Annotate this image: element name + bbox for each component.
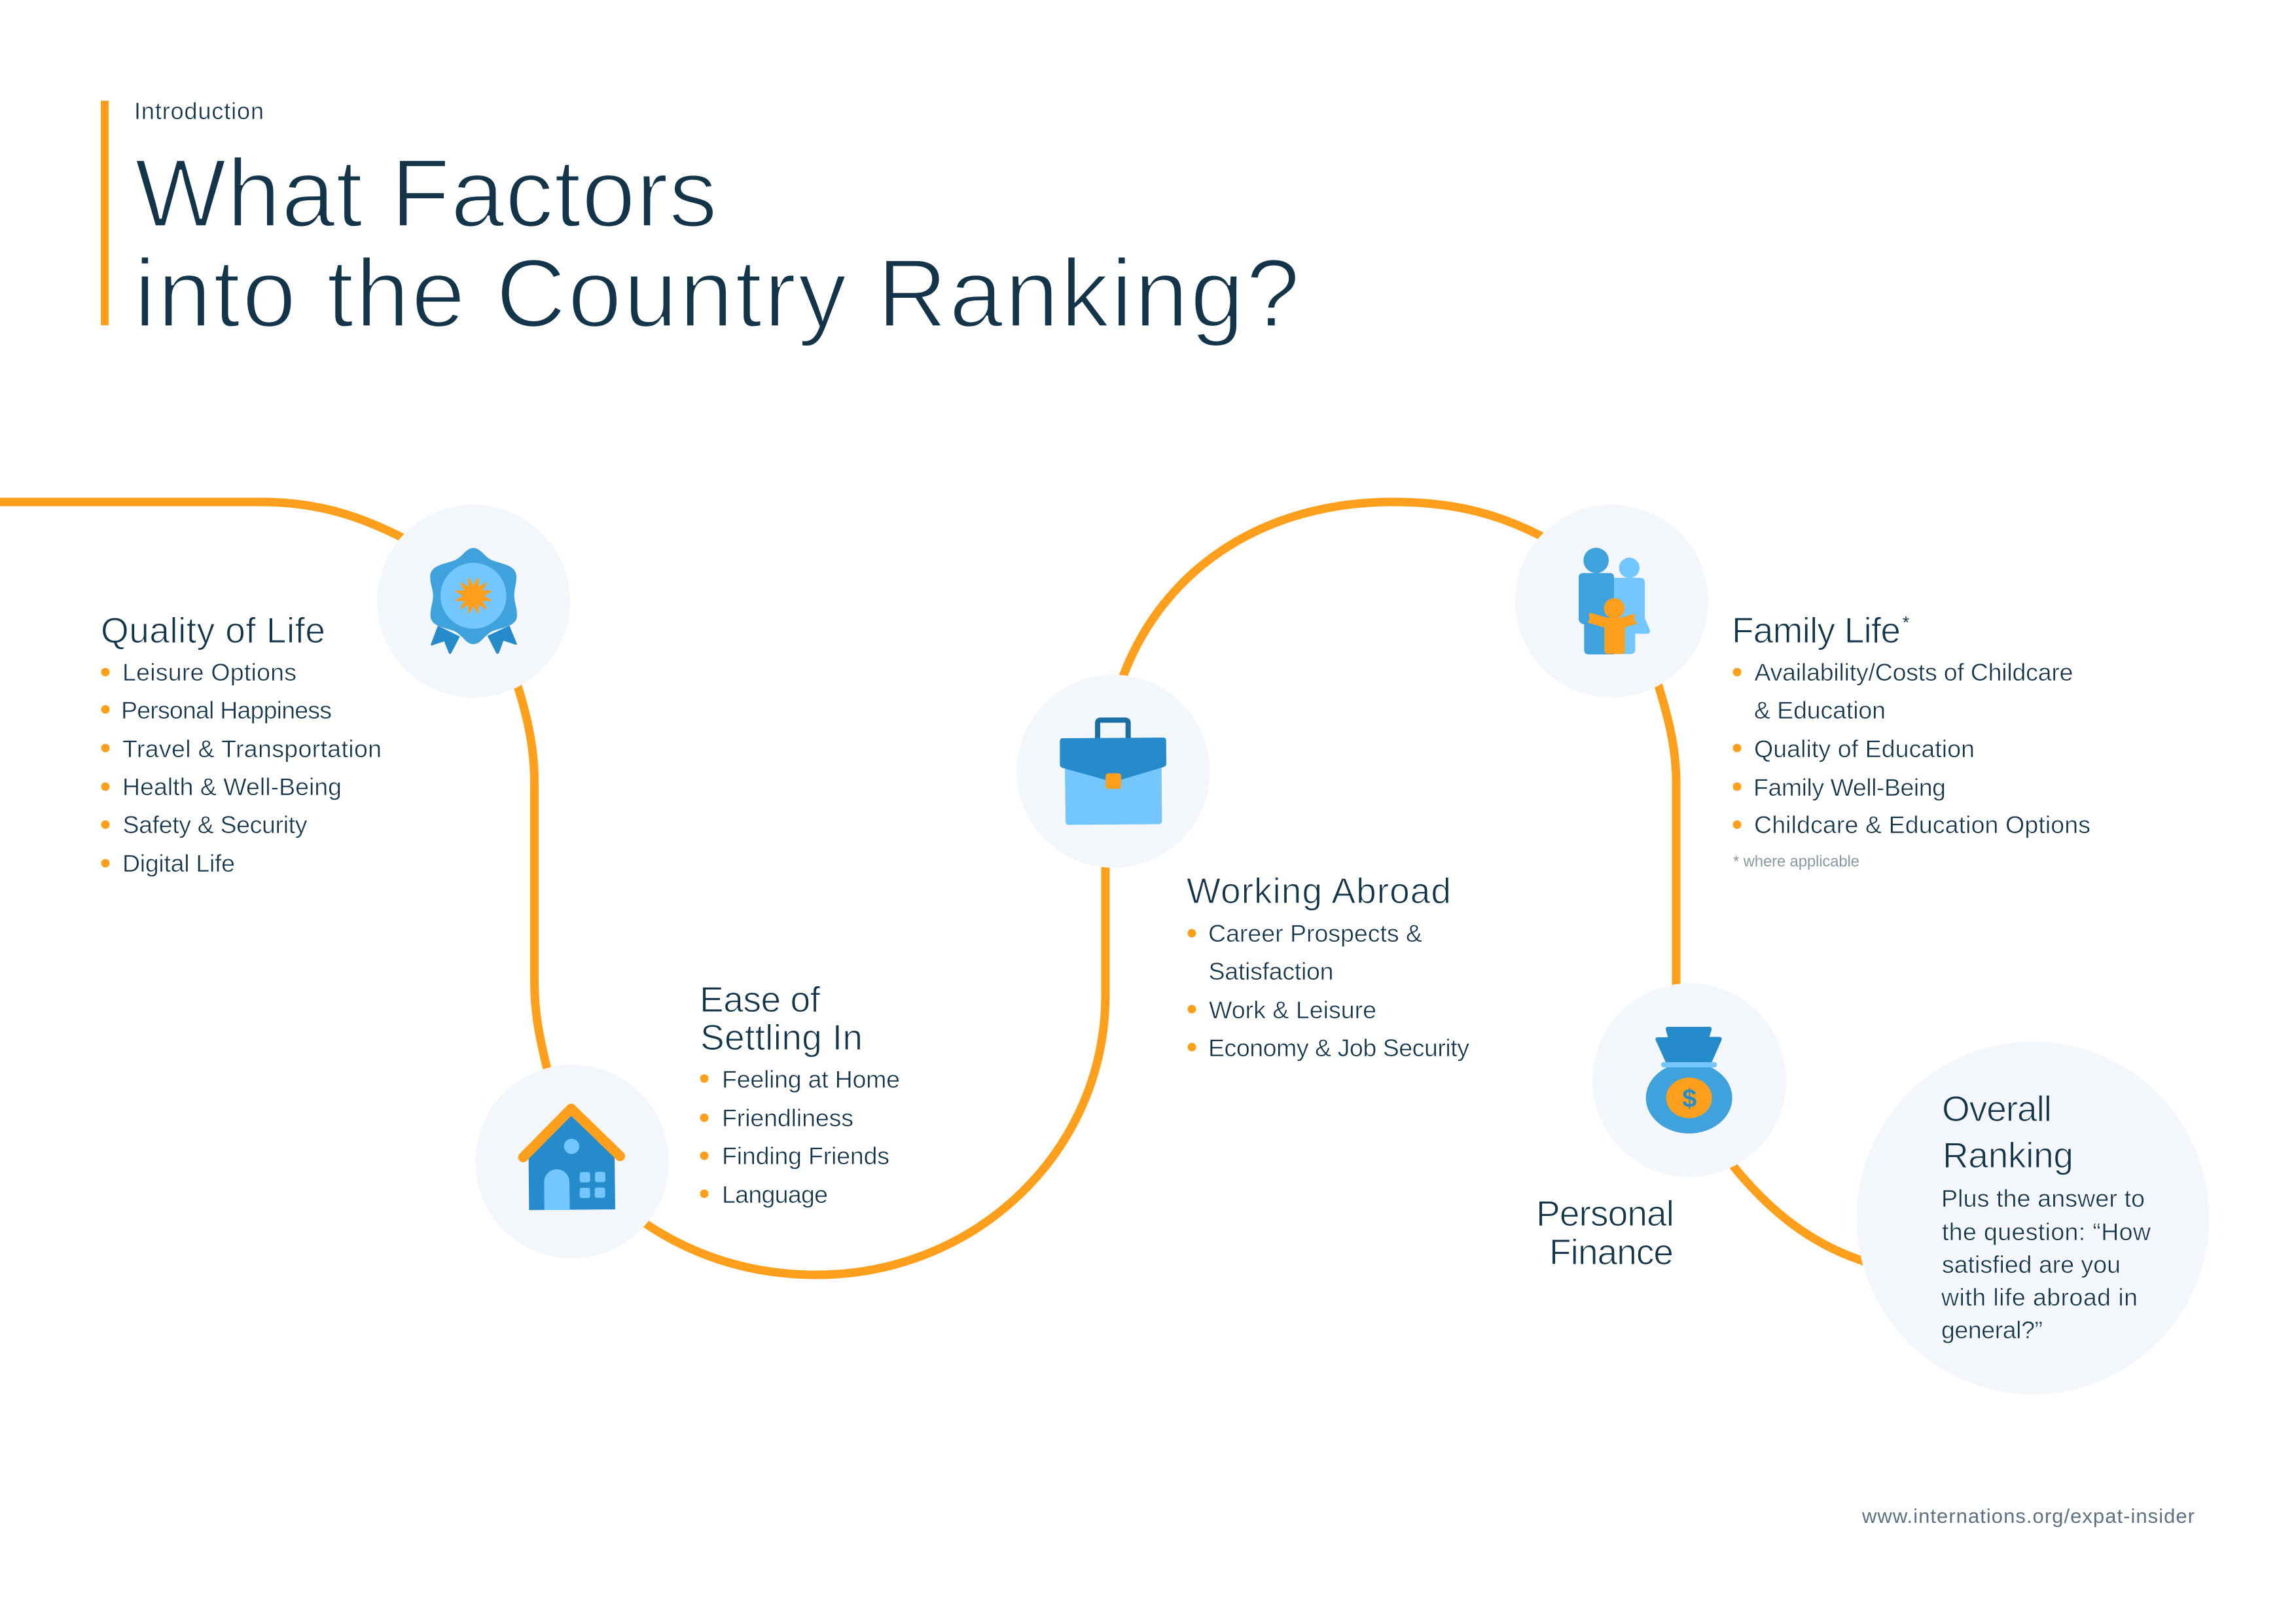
icon: house	[475, 1065, 669, 1258]
icon: money bag	[1592, 983, 1786, 1177]
panel: family life	[1732, 610, 2090, 870]
list item: Travel & Transportation	[122, 735, 382, 762]
list item: Work & Leisure	[1209, 996, 1376, 1024]
list item: Health & Well-Being	[122, 773, 342, 800]
heading: Quality of Life	[101, 610, 325, 651]
list item: Language	[722, 1181, 828, 1208]
list item: Economy & Job Security	[1208, 1034, 1469, 1061]
list item: Feeling at Home	[722, 1065, 900, 1093]
heading line 1: Personal	[1536, 1193, 1674, 1234]
heading line 1: Overall	[1942, 1088, 2052, 1129]
icon: quality of life rosette	[377, 505, 570, 698]
description: with life abroad in	[1941, 1283, 2138, 1311]
footnote: * where applicable	[1733, 853, 1859, 870]
section label: Introduction	[134, 98, 264, 124]
accent bar	[101, 101, 109, 325]
panel: quality of life	[101, 610, 382, 877]
title line 1: What Factors	[135, 139, 717, 247]
description: satisfied are you	[1942, 1251, 2121, 1278]
footer url: www.internations.org/expat-insider	[1861, 1505, 2195, 1527]
list item: Friendliness	[722, 1104, 853, 1132]
description: the question: “How	[1942, 1218, 2151, 1245]
list item: Family Well-Being	[1753, 774, 1946, 801]
heading line 1: Ease of	[700, 979, 821, 1020]
panel: overall ranking	[1856, 1042, 2210, 1394]
circle background	[1856, 1042, 2210, 1394]
icon: family	[1515, 505, 1708, 698]
description: general?”	[1941, 1316, 2043, 1344]
heading line 2: Ranking	[1943, 1135, 2073, 1175]
title line 2: into the Country Ranking?	[134, 240, 1300, 348]
panel: ease of settling in	[700, 979, 900, 1208]
list item, two lines: Satisfaction	[1208, 957, 1334, 985]
list item, two lines: Availability/Costs of Childcare	[1754, 658, 2073, 686]
list item: Safety & Security	[123, 811, 308, 838]
list item: Quality of Education	[1754, 735, 1975, 762]
list item, two lines: & Education	[1754, 696, 1886, 724]
list item: Digital Life	[122, 849, 235, 877]
orange connecting path	[0, 502, 1872, 1275]
list item: Leisure Options	[122, 658, 296, 686]
heading asterisk: *	[1903, 613, 1909, 632]
description: Plus the answer to	[1941, 1185, 2145, 1212]
title block	[101, 98, 1300, 348]
heading: Family Life	[1732, 610, 1901, 651]
description	[1941, 1185, 2151, 1344]
list item: Childcare & Education Options	[1754, 811, 2090, 838]
icon: briefcase	[1017, 675, 1210, 868]
panel: working abroad	[1187, 870, 1469, 1061]
list item: Finding Friends	[722, 1142, 889, 1169]
heading line 2: Settling In	[700, 1017, 863, 1058]
list item, two lines	[1733, 658, 2073, 724]
heading: Working Abroad	[1187, 870, 1451, 911]
list item, two lines: Career Prospects &	[1208, 919, 1422, 947]
list item: Personal Happiness	[121, 696, 332, 724]
list item, two lines	[1187, 919, 1422, 985]
icon: money bag: $	[1682, 1084, 1696, 1113]
heading line 2: Finance	[1549, 1232, 1674, 1272]
panel: personal finance	[1536, 1193, 1674, 1272]
